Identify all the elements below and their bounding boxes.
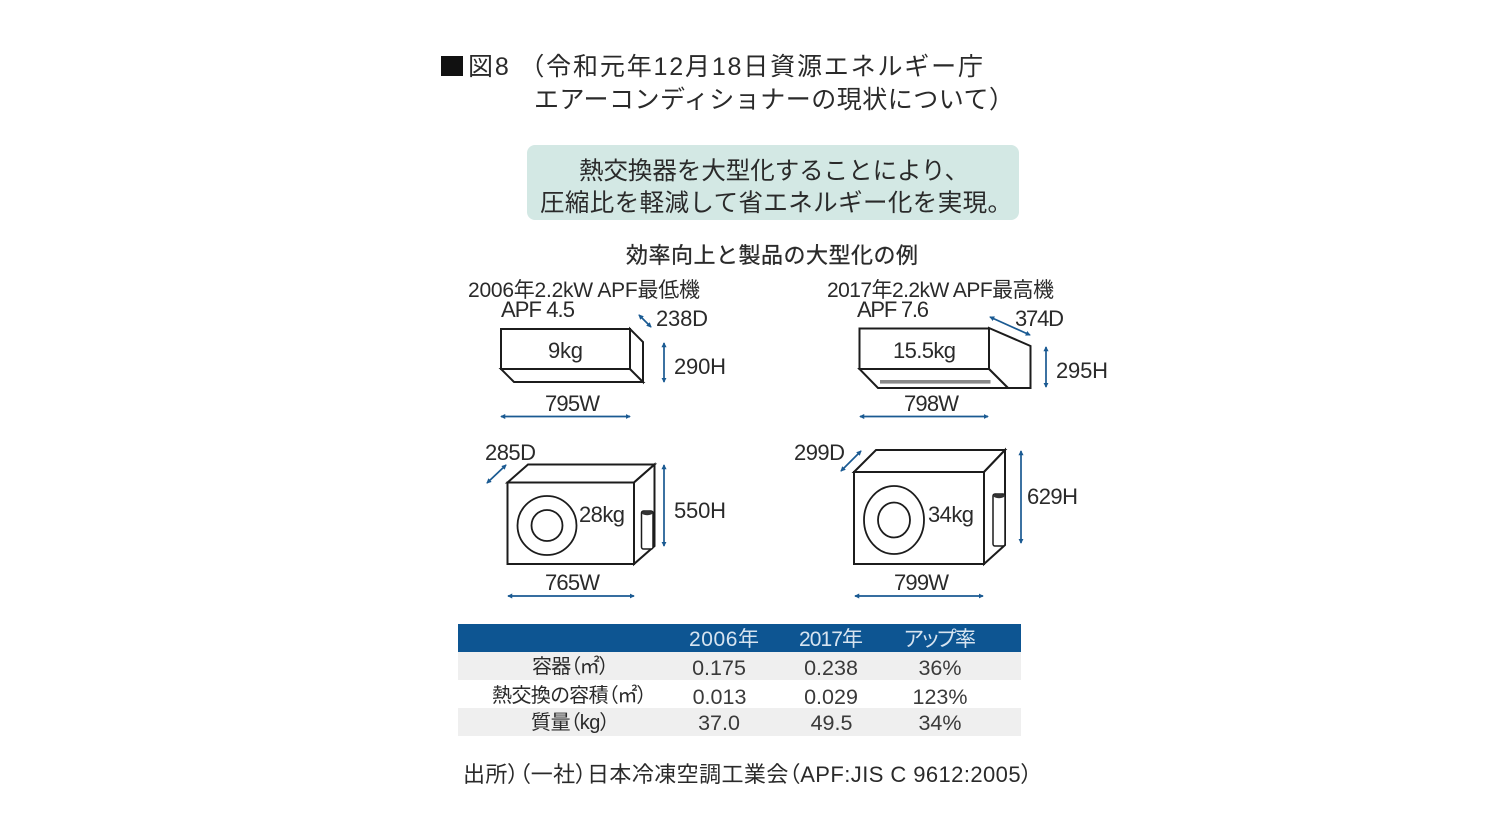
table row: mass [458,708,1021,736]
APF value 2017: APF 7.6 [857,297,929,322]
width arrow 799W [855,595,983,597]
width arrow 795W [501,416,630,418]
height label 295H: 295H [1056,358,1108,383]
width label 798W: 798W [904,391,959,416]
depth arrow 238D [639,315,651,327]
panel: 2006 indoor unit [468,279,726,416]
model heading 2017: 2017年2.2kW APF最高機 [827,279,1054,302]
outdoor unit drawing 2006 [508,464,654,564]
panel: 2017 indoor unit [827,279,1108,416]
width label 765W: 765W [545,570,600,595]
table header row: 2017年 [799,628,863,651]
table row: container: 容器（㎡） [532,654,609,678]
table row: container: 0.175 [692,656,746,680]
depth label 285D: 285D [485,440,536,465]
table header row: アップ率 [904,628,976,651]
width arrow 765W [508,595,634,597]
width label 799W: 799W [894,570,949,595]
table row: container: 0.238 [804,656,858,680]
title [441,53,1014,114]
table header row: 2006年 [689,628,759,651]
callout: heat exchanger summary [527,145,1019,220]
panel: 2006 outdoor unit [485,440,726,596]
depth arrow 299D [841,451,861,471]
height label 629H: 629H [1027,484,1078,509]
height label 550H: 550H [674,498,726,523]
outdoor unit drawing 2017 [854,450,1005,564]
table row: mass: 49.5 [811,711,852,735]
height arrow 629H [1020,451,1022,543]
table row: heat exchanger volume: 熱交換の容積（㎡） [492,683,647,707]
subheading: 効率向上と製品の大型化の例 [626,243,918,268]
table row: mass: 37.0 [698,711,740,735]
height arrow 295H [1045,347,1047,387]
table row: mass: 34% [918,711,962,735]
weight 15.5kg: 15.5kg [893,338,956,363]
comparison table [458,624,1021,736]
table row: heat exchanger volume [492,683,968,709]
height label 290H: 290H [674,354,726,379]
table row: heat exchanger volume: 0.013 [693,685,746,709]
table row: container [458,652,1021,680]
depth arrow 285D [487,465,506,483]
title line 1: 図8 （令和元年12月18日資源エネルギー庁 [468,53,983,81]
table header row [458,624,1021,652]
table row: heat exchanger volume: 0.029 [804,685,858,709]
height arrow 290H [663,343,665,382]
title line 2: エアーコンディショナーの現状について） [534,86,1014,114]
panel: 2017 outdoor unit [794,440,1078,596]
weight 28kg: 28kg [579,502,625,527]
weight 34kg: 34kg [928,502,974,527]
height arrow 550H [663,465,665,546]
table row: container: 36% [918,656,962,680]
indoor unit drawing 2017 [860,328,1030,388]
table row: mass: 質量（kg） [531,711,610,734]
depth label 299D: 299D [794,440,845,465]
depth label 238D: 238D [656,306,708,331]
width label 795W: 795W [545,391,600,416]
callout background [527,145,1019,220]
depth label 374D: 374D [1015,306,1064,331]
icon: title square marker [441,56,463,76]
APF value 2006: APF 4.5 [501,297,575,322]
width arrow 798W [860,416,988,418]
callout line 2: 圧縮比を軽減して省エネルギー化を実現。 [540,189,1012,217]
weight 9kg: 9kg [548,338,583,363]
callout line 1: 熱交換器を大型化することにより、 [579,157,969,185]
depth arrow 374D [990,317,1030,335]
table row: heat exchanger volume: 123% [912,685,968,709]
model heading 2006: 2006年2.2kW APF最低機 [468,279,700,302]
source note: 出所）（一社）日本冷凍空調工業会（APF:JIS C 9612:2005） [463,762,1032,787]
indoor unit drawing 2006 [501,329,643,382]
